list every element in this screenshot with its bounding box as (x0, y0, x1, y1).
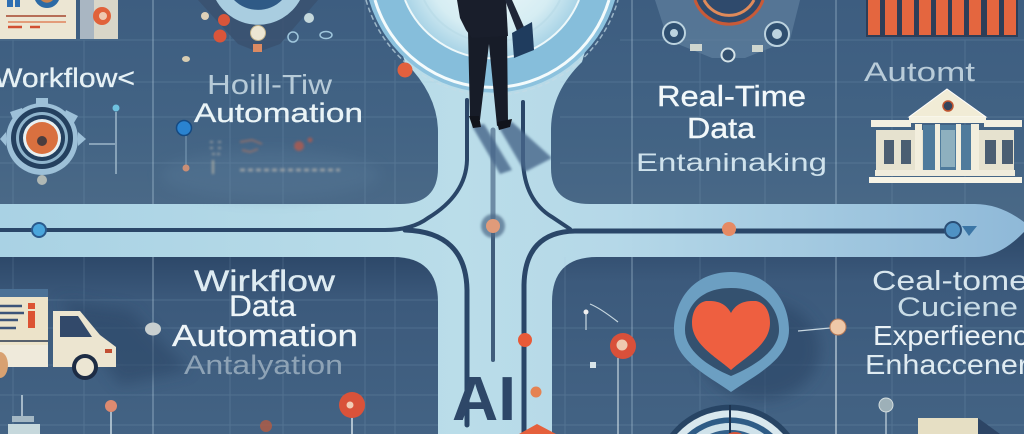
heading: Ceal-tome Cuciene Experfieence Enhaccener: Ceal-tome (872, 265, 1024, 296)
heading: Hoill-Tiw Automation: Hoill-Tiw (207, 69, 333, 100)
icon: cream box (918, 418, 1000, 434)
panel: top left (0, 0, 438, 204)
heading: Real-Time Data Entaninaking: Data (687, 113, 756, 145)
heading: Real-Time Data Entaninaking: Entaninaking (636, 149, 827, 177)
central ring portal (366, 0, 618, 95)
icon: top hub left (182, 0, 332, 62)
icon: orange bar chart (866, 0, 1018, 37)
heading: Wirkflow Data Automation: Data (229, 290, 296, 323)
jacket (457, 0, 508, 38)
panel: bottom right (552, 232, 1024, 434)
label: AI: AI (452, 365, 516, 434)
heading: Wirkflow Data Automation: Antalyation (184, 350, 343, 380)
person shadows (472, 122, 552, 174)
figure: businessman (457, 0, 534, 130)
icon: gear (0, 98, 120, 185)
heading: Wirkflow Data Automation (172, 265, 358, 380)
heading: Hoill-Tiw Automation: Automation (194, 98, 363, 128)
briefcase (512, 22, 534, 58)
arm (505, 0, 524, 31)
heading: Real-Time Data Entaninaking (636, 81, 827, 177)
panel: bottom left (0, 257, 438, 434)
icon: heart shield (674, 272, 820, 400)
heading: Ceal-tome Cuciene Experfieence Enhaccener: Cuciene (897, 292, 1018, 322)
shoes (469, 116, 512, 130)
heading: Automt: Automt (864, 57, 976, 87)
faint scribble detail (210, 138, 340, 174)
heading: Ceal-tome Cuciene Experfieence Enhaccener: Enhaccener (865, 349, 1024, 380)
legs (468, 30, 508, 126)
heading: Wirkflow Data Automation: Automation (172, 318, 358, 353)
icon: bank building (869, 89, 1022, 183)
pathway dark edge lines (0, 100, 950, 434)
hand (519, 29, 525, 35)
panel: top right (551, 0, 1024, 222)
icon: striped dome (670, 405, 790, 434)
heading: Ceal-tome Cuciene Experfieence Enhaccener: Experfieenc (873, 320, 1024, 351)
icon: report cards (0, 0, 118, 39)
heading: Wirkflow Data Automation: Wirkflow (194, 265, 335, 298)
heading: Hoill-Tiw Automation (194, 69, 363, 128)
heading: Ceal-tome Cuciene Experfieence Enhaccener (865, 265, 1024, 380)
icon: top hub right (655, 0, 800, 62)
heading: Real-Time Data Entaninaking: Real-Time (657, 81, 806, 113)
icon: delivery truck (0, 289, 190, 385)
